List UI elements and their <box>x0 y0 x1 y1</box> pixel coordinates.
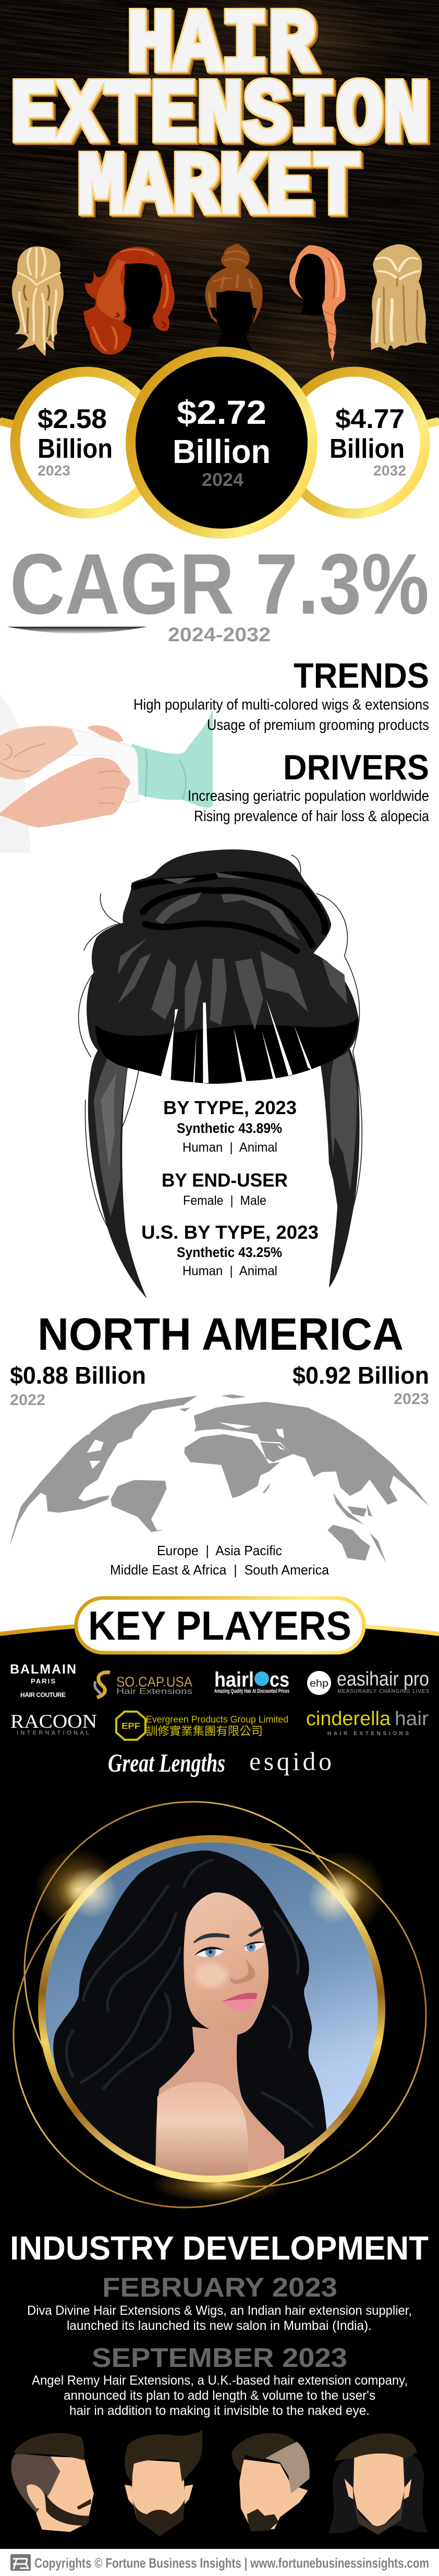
title: MARKET <box>78 139 360 239</box>
U.S. by type: U.S. BY TYPE, 2023 <box>141 1222 319 1243</box>
portrait <box>14 1802 426 2207</box>
by type: Human | Animal <box>182 1140 277 1155</box>
icon: head silhouette <box>123 263 162 329</box>
segmentation text <box>141 1097 319 1278</box>
by end-user: Female | Male <box>183 1193 266 1208</box>
circle: 2032 value: Billion <box>330 434 405 464</box>
logo: Hairlocs <box>214 1668 289 1694</box>
circle: 2023 value: 2023 <box>38 462 70 479</box>
black lower panel <box>0 1620 439 2549</box>
title: EXTENSION <box>10 67 430 167</box>
development: September 2023: SEPTEMBER 2023 <box>92 2343 347 2373</box>
black hair illustration <box>79 849 362 1299</box>
value 2022: $0.88 Billion <box>10 1362 146 1389</box>
male hairstyle illustrations <box>11 2430 429 2536</box>
nose <box>229 1957 255 1984</box>
logo: Balmain: PARIS <box>31 1677 55 1685</box>
right strand <box>319 998 360 1288</box>
logo: Cinderella Hair <box>306 1708 429 1737</box>
logo: Esqido: esqido <box>249 1747 332 1776</box>
development: September 2023: hair in addition to making it invisible to the naked eye. <box>69 2403 370 2418</box>
icon: man side fade <box>11 2433 94 2532</box>
eyes <box>196 1943 264 1957</box>
value 2022 <box>10 1362 146 1409</box>
circle: 2032 value: 2032 <box>373 462 406 479</box>
development: February 2023: FEBRUARY 2023 <box>102 2273 337 2303</box>
circle: 2024 value <box>130 351 313 534</box>
left strand <box>88 1001 147 1299</box>
icon: long blonde wig <box>371 244 427 351</box>
logo: Hairlocs: hairl <box>214 1668 254 1691</box>
wig illustrations <box>12 243 427 361</box>
circle: 2024 value: 2024 <box>202 470 244 490</box>
circle: 2023 value <box>15 372 157 514</box>
neck and shoulders <box>155 2026 284 2179</box>
title <box>10 0 430 239</box>
value 2023 <box>292 1362 429 1408</box>
heading: industry development: INDUSTRY DEVELOPMENT <box>10 2229 429 2267</box>
value 2022: 2022 <box>10 1391 45 1409</box>
other regions: Middle East & Africa | South America <box>110 1562 330 1578</box>
circle: 2024 value: $2.72 <box>177 394 266 431</box>
by type: Synthetic 43.89% <box>177 1120 282 1136</box>
industry development <box>10 2229 429 2418</box>
by type <box>163 1097 297 1155</box>
world map <box>10 1394 429 1563</box>
logo: Cinderella Hair: cinderella <box>306 1708 391 1730</box>
by type: BY TYPE, 2023 <box>163 1097 297 1118</box>
logo: Fortune Business Insights mark <box>10 2554 31 2571</box>
icon: man with beard and tousled hair <box>125 2430 202 2536</box>
logo: Balmain: BALMAIN <box>10 1662 76 1677</box>
dome and bun <box>87 849 359 1084</box>
hair mass <box>53 1850 326 2179</box>
face <box>184 1893 269 2035</box>
icon: head silhouette <box>295 254 325 315</box>
CAGR block <box>7 536 429 646</box>
lips <box>221 1999 256 2011</box>
value 2023: 2023 <box>394 1390 429 1408</box>
icon: man with long hair <box>329 2433 429 2535</box>
ring glows <box>34 1848 386 2203</box>
drivers list <box>188 788 430 825</box>
hair strands <box>67 1860 312 2126</box>
footer <box>0 2549 439 2576</box>
logo: Cinderella Hair: HAIR EXTENSIONS <box>327 1731 409 1737</box>
circle: 2023 value: $2.58 <box>38 404 107 434</box>
logo: Easihair Pro <box>307 1668 429 1695</box>
logo: Evergreen Products Group <box>116 1712 288 1740</box>
inner ring glows <box>65 1866 360 1924</box>
trends and drivers <box>133 656 430 825</box>
company logos <box>10 1662 429 1777</box>
logo: Evergreen Products Group: 訓修實業集團有限公司 <box>146 1725 263 1738</box>
logo: Racoon: RACOON <box>10 1711 97 1732</box>
circle: 2032 value <box>283 372 425 514</box>
icon: red wavy wig <box>83 247 175 355</box>
development: February 2023 <box>27 2273 412 2333</box>
header panel <box>0 0 439 429</box>
icon: man side shave <box>231 2433 310 2531</box>
U.S. by type <box>141 1222 319 1278</box>
by end-user <box>162 1169 288 1208</box>
development: February 2023: Diva Divine Hair Extensions & Wigs, an Indian hair extension supplier, <box>27 2303 412 2318</box>
trends list <box>133 697 429 734</box>
development: February 2023: launched its launched its new salon in Mumbai (India). <box>67 2318 372 2333</box>
main gold ring <box>42 1839 382 2179</box>
logo: Evergreen Products Group: Evergreen Products Group Limited <box>146 1714 288 1725</box>
logo: Hairlocs: Amazing Quality Hair At Discounted Prices <box>214 1688 289 1694</box>
logo: Great Lengths: Great Lengths <box>108 1748 225 1777</box>
thin gold rings <box>14 1802 426 2207</box>
heading: drivers: DRIVERS <box>283 748 429 787</box>
shoulder highlight <box>156 2082 248 2179</box>
icon: head silhouette <box>215 290 253 350</box>
bandaged hand photo <box>0 694 213 853</box>
heading: north america: NORTH AMERICA <box>38 1309 404 1360</box>
development: September 2023 <box>32 2343 408 2418</box>
U.S. by type: Synthetic 43.25% <box>177 1244 282 1260</box>
logo: Balmain <box>10 1662 76 1699</box>
regional panel <box>10 1309 429 1578</box>
icon: peach braid wig <box>289 245 346 361</box>
development: September 2023: Angel Remy Hair Extensions, a U.K.-based hair extension company, <box>32 2373 408 2388</box>
other regions <box>110 1543 330 1578</box>
circle: 2024 value: Billion <box>173 433 271 470</box>
logo: So.Cap.USA: Hair Extensions <box>116 1687 192 1696</box>
lens shadow accent <box>7 627 147 633</box>
key players pill: KEY PLAYERS <box>88 1603 351 1649</box>
logo: Hairlocs: cs <box>270 1668 289 1691</box>
logo: Evergreen Products Group: EPF <box>121 1721 140 1731</box>
development: September 2023: announced its plan to add length & volume to the user's <box>64 2388 375 2403</box>
U.S. by type: Human | Animal <box>182 1264 277 1278</box>
logo: So.Cap.USA <box>95 1672 192 1698</box>
logo: Easihair Pro: MEASURABLY CHANGING LIVES <box>337 1689 429 1694</box>
CAGR period: 2024-2032 <box>168 624 271 646</box>
logo: So.Cap.USA: SO.CAP.USA <box>116 1674 192 1690</box>
logo: Racoon: INTERNATIONAL <box>17 1730 89 1736</box>
icon: blonde half-up wig <box>12 246 64 356</box>
logo: Easihair Pro: ehp <box>310 1678 328 1689</box>
icon: brown bun wig <box>205 243 263 350</box>
heading: trends: TRENDS <box>294 656 429 695</box>
logo: Balmain: HAIR COUTURE <box>20 1691 66 1699</box>
market size circles <box>15 351 425 534</box>
circle: 2023 value: Billion <box>38 434 113 464</box>
logo: Easihair Pro: easihair pro <box>337 1668 429 1690</box>
eyebrows <box>193 1926 264 1943</box>
by end-user: BY END-USER <box>162 1169 288 1191</box>
woman <box>53 1850 326 2179</box>
logo: Cinderella Hair: hair <box>395 1708 429 1730</box>
value 2023: $0.92 Billion <box>292 1362 429 1389</box>
other regions: Europe | Asia Pacific <box>157 1543 282 1558</box>
circle: 2032 value: $4.77 <box>335 404 405 434</box>
